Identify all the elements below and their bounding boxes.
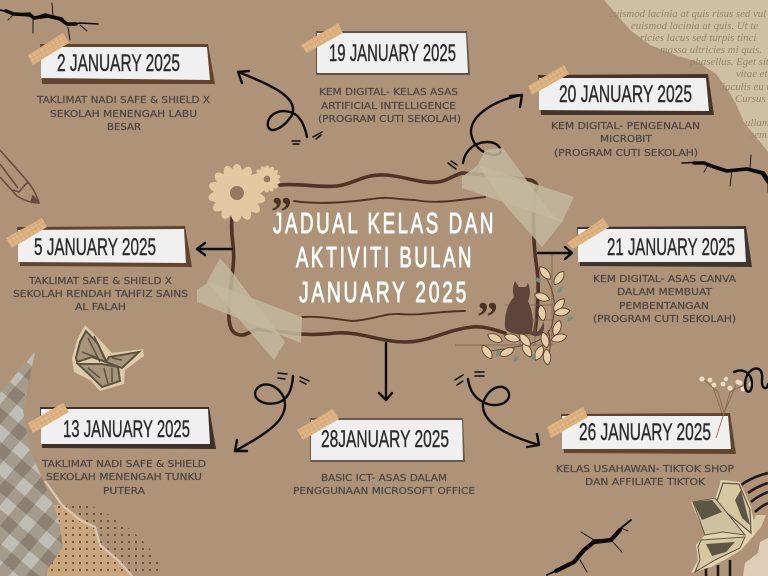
arrow to 20 January: [448, 95, 522, 169]
icon: large daisy: [207, 164, 267, 222]
crack top left: [0, 3, 98, 40]
wreath with cat: [455, 255, 574, 365]
card: 13 January 2025: TAKLIMAT NADI SAFE & SHIELD: [41, 459, 206, 470]
card: 13 January 2025: 13 JANUARY 2025: [63, 416, 190, 443]
card: 2 January 2025: 2 JANUARY 2025: [57, 50, 180, 77]
card: 5 January 2025: [6, 218, 192, 313]
concentric stripes: [706, 473, 768, 576]
torn newspaper scrap: [604, 0, 768, 152]
torn gingham paper: [0, 352, 165, 576]
card: 2 January 2025: [28, 33, 215, 133]
arrow to 13 January: [235, 373, 309, 451]
card: 19 January 2025: KEM DIGITAL- KELAS ASAS: [319, 87, 458, 98]
card: 20 January 2025: [528, 65, 714, 159]
arrow to 26 January: [455, 372, 539, 447]
card: 20 January 2025: (PROGRAM CUTI SEKOLAH): [554, 148, 698, 159]
card: 19 January 2025: 19 JANUARY 2025: [329, 40, 456, 67]
dried flowers: [699, 376, 753, 438]
card: 28 January 2025: [293, 409, 475, 497]
tape left: [197, 258, 302, 360]
card: 21 January 2025: DALAM MEMBUAT: [617, 287, 712, 298]
card: 13 January 2025: [28, 403, 216, 497]
card: 5 January 2025: AL FALAH: [75, 302, 126, 313]
card: 26 January 2025: DAN AFFILIATE TIKTOK: [585, 477, 706, 488]
torn newspaper scrap: euismod lacinia at quis risus sed vul: [609, 8, 766, 20]
card: 13 January 2025: SEKOLAH MENENGAH TUNKU: [46, 472, 202, 483]
card: 21 January 2025: (PROGRAM CUTI SEKOLAH): [593, 314, 736, 325]
torn newspaper scrap: sem: [750, 129, 767, 141]
card: 19 January 2025: ARTIFICIAL INTELLIGENCE: [321, 101, 456, 112]
icon: butterfly right: [691, 480, 766, 573]
card: 28 January 2025: BASIC ICT- ASAS DALAM: [321, 473, 447, 484]
card: 2 January 2025: TAKLIMAT NADI SAFE & SHIELD X: [36, 95, 211, 106]
card: 19 January 2025: (PROGRAM CUTI SEKOLAH): [318, 114, 461, 125]
title: AKTIVITI BULAN: [296, 242, 474, 274]
card: 26 January 2025: KELAS USAHAWAN- TIKTOK SHOP: [556, 464, 734, 475]
arrow to 2 January: [238, 71, 322, 144]
icon: small daisy: [253, 165, 281, 193]
card: 19 January 2025: [301, 23, 470, 125]
torn newspaper scrap: ricies lacus sed turpis tinci: [640, 32, 756, 44]
card: 20 January 2025: 20 JANUARY 2025: [559, 81, 692, 108]
card: 13 January 2025: PUTERA: [103, 486, 146, 497]
torn newspaper scrap: massa ultricies mi quis.: [660, 44, 762, 56]
card: 21 January 2025: [567, 218, 752, 325]
torn newspaper scrap: Cursus: [735, 93, 766, 105]
central frame: [229, 173, 538, 342]
card: 21 January 2025: PEMBENTANGAN: [619, 301, 709, 312]
bottom right paper scrap: [743, 538, 768, 576]
card: 21 January 2025: KEM DIGITAL- ASAS CANVA: [593, 274, 737, 285]
title: JADUAL KELAS DAN: [273, 208, 496, 240]
card: 20 January 2025: KEM DIGITAL- PENGENALAN: [551, 121, 700, 132]
arrow to 5 January: [197, 243, 232, 255]
card: 5 January 2025: SEKOLAH RENDAH TAHFIZ SAINS: [13, 289, 188, 300]
card: 5 January 2025: 5 JANUARY 2025: [34, 234, 156, 261]
card: 28 January 2025: 28JANUARY 2025: [321, 426, 449, 453]
card: 26 January 2025: [547, 407, 736, 488]
card: 20 January 2025: MICROBIT: [600, 134, 652, 145]
torn newspaper scrap: euismod lacinia at quis. Ut te: [631, 20, 758, 32]
arrow down to 28 January: [379, 343, 392, 400]
arrow to 21 January: [538, 247, 572, 259]
card: 28 January 2025: PENGGUNAAN MICROSOFT OFFICE: [293, 486, 475, 497]
card: 2 January 2025: BESAR: [107, 122, 141, 133]
card: 5 January 2025: TAKLIMAT SAFE & SHIELD X: [28, 276, 173, 287]
icon: pencil: [0, 150, 39, 203]
crack right: [682, 155, 768, 192]
opening quote mark: ”: [271, 190, 292, 236]
icon: butterfly left: [72, 325, 144, 391]
crack bottom: [547, 520, 631, 575]
tape right: [462, 148, 574, 247]
squiggle right edge: [734, 368, 768, 392]
closing quote mark: ”: [477, 295, 498, 341]
title: [273, 208, 496, 309]
card: 2 January 2025: SEKOLAH MENENGAH LABU: [50, 109, 197, 120]
title: JANUARY 2025: [299, 277, 469, 309]
